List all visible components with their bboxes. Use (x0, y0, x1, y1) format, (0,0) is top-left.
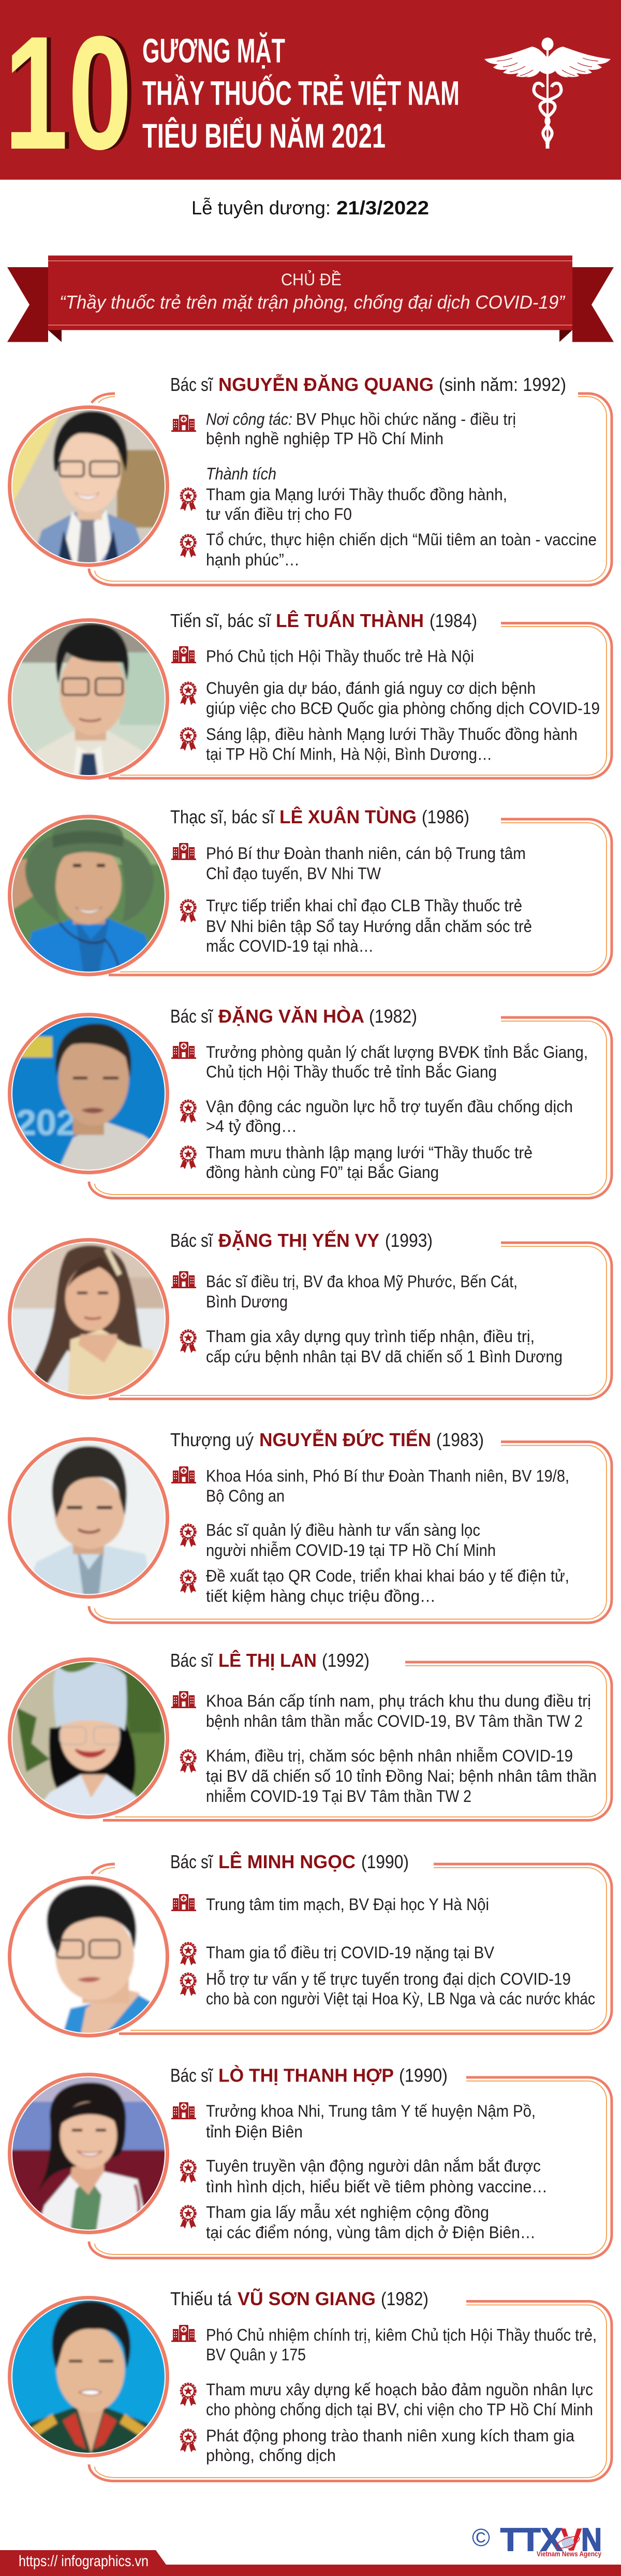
title: GƯƠNG MẶT (142, 31, 285, 69)
workplace text: Trung tâm tim mạch, BV Đại học Y Hà Nội (206, 1895, 489, 1914)
heading (170, 1649, 369, 1671)
icon: medal (180, 1524, 196, 1547)
heading: Bác sĩ (170, 1851, 214, 1872)
achievement text: giúp việc cho BCĐ Quốc gia phòng chống dịch COVID-19 (206, 699, 600, 718)
big number 10: 10 (4, 3, 132, 183)
icon: hospital (171, 1691, 196, 1708)
ribbon text: “Thầy thuốc trẻ trên mặt trận phòng, chống đại dịch COVID-19” (60, 292, 566, 313)
portrait (9, 1240, 168, 1398)
workplace text (206, 844, 526, 883)
logo: TTXVN (472, 2522, 602, 2558)
logo: TTXVN: V (560, 2522, 582, 2558)
heading: VŨ SƠN GIANG (238, 2288, 376, 2309)
icon: hospital (171, 415, 196, 432)
achievement text: BV Nhi biên tập Sổ tay Hướng dẫn chăm sóc trẻ (206, 917, 532, 936)
achievement text (206, 1097, 573, 1136)
icon: medal (180, 1100, 196, 1123)
icon: medal (180, 1973, 196, 1996)
achievement text: Tham gia tổ điều trị COVID-19 nặng tại BV (206, 1943, 495, 1962)
achievement text: Tổ chức, thực hiện chiến dịch “Mũi tiêm an toàn - vaccine (206, 530, 597, 549)
heading (170, 1429, 484, 1450)
heading: LÊ MINH NGỌC (218, 1851, 356, 1872)
achievement text: tư vấn điều trị cho F0 (206, 505, 352, 523)
workplace text: Bình Dương (206, 1292, 288, 1311)
portrait (9, 407, 168, 565)
achievement text: Khám, điều trị, chăm sóc bệnh nhân nhiễm COVID-19 (206, 1747, 573, 1765)
heading (170, 2288, 428, 2309)
workplace text (206, 1043, 588, 1081)
panel: card 4 Đặng Văn Hòa (9, 1005, 612, 1198)
heading: (1982) (381, 2288, 428, 2309)
achievement text: >4 tỷ đồng… (206, 1117, 297, 1136)
icon: medal (180, 488, 196, 511)
heading (170, 2064, 448, 2086)
heading (170, 1851, 409, 1872)
logo: TTXVN: N (581, 2522, 602, 2558)
workplace text: Bác sĩ điều trị, BV đa khoa Mỹ Phước, Bến Cát, (206, 1272, 518, 1291)
workplace text (206, 1272, 518, 1311)
achievement text (206, 725, 578, 763)
achievement text: hạnh phúc”… (206, 550, 300, 569)
icon: medal (180, 728, 196, 751)
achievement text: Tham gia xây dựng quy trình tiếp nhận, điều trị, (206, 1327, 535, 1346)
logo: TTXVN: TTX (500, 2522, 563, 2558)
icon: hospital (171, 1466, 196, 1483)
workplace text: Khoa Hóa sinh, Phó Bí thư Đoàn Thanh niên, BV 19/8, (206, 1466, 569, 1485)
icon: medal (180, 1570, 196, 1593)
workplace text: Chỉ đạo tuyến, BV Nhi TW (206, 864, 381, 883)
heading: (1992) (322, 1650, 369, 1671)
header banner (0, 0, 621, 183)
heading: Bác sĩ (170, 374, 214, 395)
heading: ĐẶNG VĂN HÒA (218, 1005, 364, 1027)
achievement text: người nhiễm COVID-19 tại TP Hồ Chí Minh (206, 1541, 496, 1560)
heading (170, 1005, 417, 1027)
workplace text: BV Quân y 175 (206, 2346, 306, 2364)
heading: Bác sĩ (170, 2065, 214, 2086)
heading (170, 806, 469, 827)
date line: 21/3/2022 (336, 197, 429, 219)
achievement text: tình hình dịch, hiểu biết về tiêm phòng vaccine… (206, 2177, 548, 2196)
logo: TTXVN: Vietnam News Agency (537, 2550, 601, 2558)
achievement text (206, 1970, 595, 2008)
achievement text: tại BV dã chiến số 10 tỉnh Đồng Nai; bệnh nhân tâm thần (206, 1767, 597, 1785)
icon: medal (180, 2429, 196, 2452)
achievement text: Tham gia lấy mẫu xét nghiệm cộng đồng (206, 2203, 489, 2221)
heading: (1984) (430, 610, 477, 631)
heading: (1993) (385, 1230, 433, 1251)
achievement text: đồng hành cùng F0” tại Bắc Giang (206, 1163, 439, 1182)
icon: hospital (171, 1894, 196, 1911)
footer bar (0, 2550, 621, 2576)
achievement text (206, 896, 532, 955)
title: TIÊU BIỂU NĂM 2021 (142, 117, 386, 155)
workplace text: Phó Chủ tịch Hội Thầy thuốc trẻ Hà Nội (206, 647, 474, 666)
big number 10: 10 (8, 3, 136, 183)
achievement text: Tham mưu xây dựng kế hoạch bảo đảm nguồn nhân lực (206, 2380, 593, 2399)
portrait (9, 2298, 168, 2455)
ribbon text: CHỦ ĐỀ (281, 270, 342, 289)
heading: ĐẶNG THỊ YẾN VY (218, 1230, 379, 1251)
workplace text (206, 2102, 536, 2141)
icon: hospital (171, 2325, 196, 2342)
heading (170, 373, 566, 395)
portrait: 202 (16, 1102, 77, 1143)
achievement text (206, 1567, 569, 1605)
achievement text (206, 679, 600, 718)
achievement text: Phát động phong trào thanh niên xung kích tham gia (206, 2426, 574, 2445)
workplace text: Chủ tịch Hội Thầy thuốc trẻ tỉnh Bắc Giang (206, 1063, 497, 1081)
panel: card 7 Lê Thị Lan (9, 1649, 612, 1821)
achievement text: tiết kiệm hàng chục triệu đồng… (206, 1587, 436, 1605)
panel: card 5 Đặng Thị Yến Vy (9, 1230, 612, 1399)
workplace text (206, 410, 516, 448)
icon: medal (180, 900, 196, 923)
portrait (9, 1439, 168, 1597)
achievement text: tại TP Hồ Chí Minh, Hà Nội, Bình Dương… (206, 745, 492, 763)
footer url: https:// infographics.vn (19, 2553, 149, 2570)
heading: Thượng uý (170, 1429, 254, 1450)
achievement text: cấp cứu bệnh nhân tại BV dã chiến số 1 Bình Dương (206, 1347, 563, 1366)
achievement text: Sáng lập, điều hành Mạng lưới Thầy Thuốc đồng hành (206, 725, 578, 744)
achievement text: nhiễm COVID-19 Tại BV Tâm thần TW 2 (206, 1787, 471, 1806)
workplace text: tỉnh Điện Biên (206, 2122, 303, 2141)
achievement text: Chuyên gia dự báo, đánh giá nguy cơ dịch bệnh (206, 679, 536, 697)
panel: card 3 Lê Xuân Tùng (9, 806, 612, 975)
date line: Lễ tuyên dương: (191, 197, 331, 219)
panel: card 9 Lò Thị Thanh Hợp (9, 2064, 612, 2258)
heading: Bác sĩ (170, 1650, 214, 1671)
achievement text: tại các điểm nóng, vùng tâm dịch ở Điện Biên… (206, 2223, 536, 2242)
heading: (sinh năm: 1992) (439, 374, 566, 395)
heading: Thạc sĩ, bác sĩ (170, 806, 275, 827)
panel: card 10 Vũ Sơn Giang (9, 2288, 612, 2481)
icon: hospital (171, 1271, 196, 1288)
workplace text: Bộ Công an (206, 1487, 285, 1505)
portrait (9, 2074, 168, 2233)
icon: medal (180, 1750, 196, 1773)
icon: hospital (171, 646, 196, 663)
portrait (9, 1659, 168, 1817)
achievement text (206, 485, 507, 523)
icon: medal (180, 535, 196, 558)
achievement text: Trực tiếp triển khai chỉ đạo CLB Thầy thuốc trẻ (206, 896, 522, 915)
date line (191, 197, 429, 219)
portrait (9, 620, 168, 778)
heading: LÒ THỊ THANH HỢP (218, 2064, 394, 2086)
heading (170, 1230, 433, 1251)
workplace text: Trưởng khoa Nhi, Trung tâm Y tế huyện Nậm Pồ, (206, 2102, 536, 2120)
achievement text (206, 2157, 548, 2196)
title (142, 31, 460, 155)
achievement text (206, 1327, 563, 1366)
workplace text: Phó Bí thư Đoàn thanh niên, cán bộ Trung tâm (206, 844, 526, 863)
heading: (1986) (422, 806, 469, 827)
portrait (9, 1015, 168, 1172)
achievement text (206, 2203, 536, 2242)
portrait (9, 817, 168, 974)
achievement text: Hỗ trợ tư vấn y tế trực tuyến trong đại dịch COVID-19 (206, 1970, 571, 1988)
icon: medal (180, 1146, 196, 1169)
workplace text (206, 1692, 591, 1730)
panel: card 6 Nguyễn Đức Tiến (9, 1429, 612, 1623)
achievement text: Tuyên truyền vận động người dân nắm bắt được (206, 2157, 541, 2175)
achievement text: Bác sĩ quản lý điều hành tư vấn sàng lọc (206, 1521, 480, 1539)
achievement text: phòng, chống dịch (206, 2446, 336, 2465)
portrait (9, 1878, 168, 2036)
workplace text: Trưởng phòng quản lý chất lượng BVĐK tỉnh Bắc Giang, (206, 1043, 588, 1061)
icon: medal (180, 2206, 196, 2229)
heading: Bác sĩ (170, 1230, 214, 1251)
achievement text (206, 1521, 496, 1560)
ribbon text (60, 270, 566, 313)
icon: medal (180, 1943, 196, 1966)
achievement text (206, 2380, 593, 2419)
heading: LÊ THỊ LAN (218, 1649, 317, 1671)
heading: Tiến sĩ, bác sĩ (170, 610, 272, 631)
logo: TTXVN: © (472, 2524, 490, 2552)
workplace text (206, 1466, 569, 1505)
workplace text: bệnh nhân tâm thần mắc COVID-19, BV Tâm thần TW 2 (206, 1712, 583, 1730)
achievement text: Tham gia Mạng lưới Thầy thuốc đồng hành, (206, 485, 507, 504)
workplace text: Khoa Bán cấp tính nam, phụ trách khu thu dung điều trị (206, 1692, 591, 1710)
achievement text (206, 530, 597, 569)
heading: (1983) (436, 1429, 484, 1450)
achievement text: cho phòng chống dịch tại BV, chi viện cho TP Hồ Chí Minh (206, 2400, 593, 2419)
achievement text: Đề xuất tạo QR Code, triển khai khai báo y tế điện tử, (206, 1567, 569, 1585)
workplace text: Nơi công tác: (206, 410, 292, 429)
workplace text (206, 2326, 597, 2364)
workplace text: BV Phục hồi chức năng - điều trị (296, 410, 516, 429)
theme ribbon (7, 256, 614, 342)
heading: LÊ XUÂN TÙNG (279, 806, 417, 827)
achievement text (206, 1143, 533, 1182)
heading: (1990) (361, 1851, 409, 1872)
achievements heading: Thành tích (206, 464, 276, 483)
title: THẦY THUỐC TRẺ VIỆT NAM (142, 74, 460, 112)
icon: hospital (171, 1042, 196, 1059)
heading: Thiếu tá (170, 2288, 232, 2309)
icon: medal (180, 2383, 196, 2406)
heading: (1990) (399, 2065, 448, 2086)
heading: Bác sĩ (170, 1006, 214, 1027)
achievement text: mắc COVID-19 tại nhà… (206, 937, 374, 955)
icon: medal (180, 2160, 196, 2183)
icon: caduceus (484, 37, 611, 149)
heading: NGUYỄN ĐĂNG QUANG (218, 373, 434, 395)
heading: LÊ TUẤN THÀNH (276, 609, 424, 631)
panel: card 2 Lê Tuấn Thành (9, 609, 612, 778)
icon: hospital (171, 2102, 196, 2119)
panel: card 1 Nguyễn Đăng Quang (9, 373, 612, 585)
icon: medal (180, 682, 196, 705)
icon: medal (180, 1330, 196, 1353)
heading: NGUYỄN ĐỨC TIẾN (259, 1429, 431, 1450)
achievement text (206, 1747, 597, 1806)
achievement text: Tham mưu thành lập mạng lưới “Thầy thuốc trẻ (206, 1143, 533, 1162)
panel: card 8 Lê Minh Ngọc (9, 1851, 612, 2036)
icon: hospital (171, 843, 196, 860)
workplace text: bệnh nghề nghiệp TP Hồ Chí Minh (206, 429, 443, 448)
heading: (1982) (369, 1006, 417, 1027)
achievement text: Vận động các nguồn lực hỗ trợ tuyến đầu chống dịch (206, 1097, 573, 1116)
heading (170, 609, 477, 631)
achievement text (206, 2426, 574, 2465)
